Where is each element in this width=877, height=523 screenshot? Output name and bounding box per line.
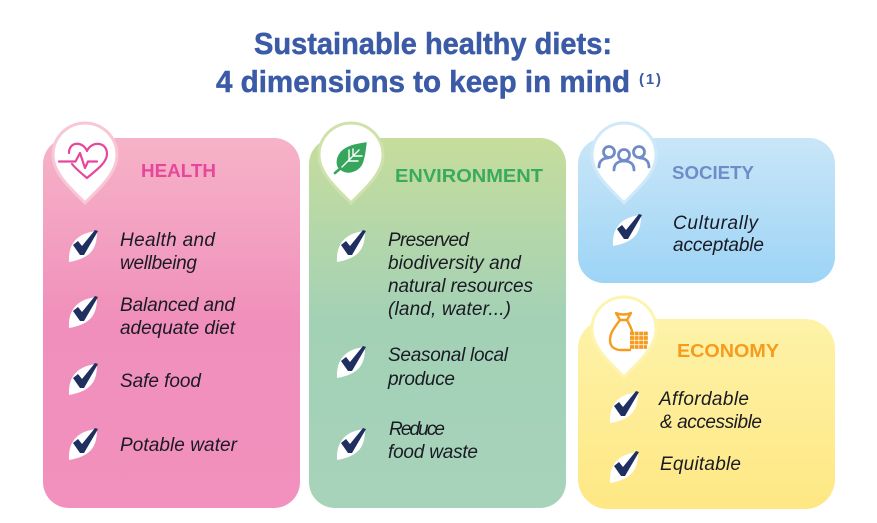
- icon: three people: [599, 146, 649, 170]
- item: potable water: [69, 428, 238, 460]
- item: preserved biodiversity: (land, water...): [388, 299, 511, 320]
- title: 4 dimensions to keep in mind: [216, 64, 630, 99]
- item: affordable and accessible: Affordable: [658, 389, 749, 410]
- item: health and wellbeing: Health and: [120, 230, 216, 251]
- panel: environment: [309, 123, 566, 508]
- panel: society: [578, 123, 835, 283]
- title: (1): [639, 71, 661, 88]
- item: affordable and accessible: & accessible: [660, 412, 762, 433]
- item: equitable: [610, 451, 741, 483]
- item: health and wellbeing: [69, 230, 216, 274]
- heading: health: HEALTH: [141, 161, 216, 181]
- item: reduce food waste: [337, 419, 478, 463]
- item: safe food: [69, 363, 202, 395]
- panel: health: [43, 123, 300, 508]
- item: health and wellbeing: wellbeing: [120, 253, 197, 274]
- item: balanced and adequate diet: Balanced and: [120, 295, 236, 316]
- item: equitable: Equitable: [660, 454, 741, 475]
- item: culturally acceptable: Culturally: [673, 213, 760, 234]
- item: preserved biodiversity: Preserved: [388, 230, 470, 251]
- item: balanced and adequate diet: adequate diet: [120, 318, 236, 339]
- item: safe food: Safe food: [120, 371, 202, 392]
- pin: society: [592, 123, 656, 203]
- item: preserved biodiversity: biodiversity and: [388, 253, 522, 274]
- item: balanced and adequate diet: [69, 295, 236, 339]
- icon: money bag and coins: [610, 313, 648, 350]
- pin: environment: [319, 123, 383, 203]
- icon: heart with pulse: [59, 144, 107, 178]
- item: seasonal local produce: [337, 345, 509, 390]
- pin: economy: [592, 297, 656, 377]
- item: seasonal local produce: produce: [387, 369, 455, 390]
- title: Sustainable healthy diets:: [254, 26, 612, 61]
- item: potable water: Potable water: [120, 435, 238, 456]
- heading: environment: ENVIRONMENT: [395, 166, 543, 186]
- item: reduce food waste: Reduce: [389, 419, 445, 440]
- heading: society: SOCIETY: [672, 163, 754, 183]
- item: culturally acceptable: acceptable: [673, 235, 764, 256]
- item: seasonal local produce: Seasonal local: [388, 345, 509, 366]
- title: [216, 26, 661, 99]
- item: culturally acceptable: [613, 213, 764, 256]
- pin: health: [53, 123, 117, 203]
- item: preserved biodiversity: natural resources: [388, 276, 534, 297]
- icon: leaf: [335, 143, 366, 173]
- panel: economy: [578, 297, 835, 509]
- item: reduce food waste: food waste: [388, 442, 478, 463]
- item: preserved biodiversity: [337, 230, 534, 320]
- heading: economy: ECONOMY: [677, 341, 779, 361]
- item: affordable and accessible: [610, 389, 762, 433]
